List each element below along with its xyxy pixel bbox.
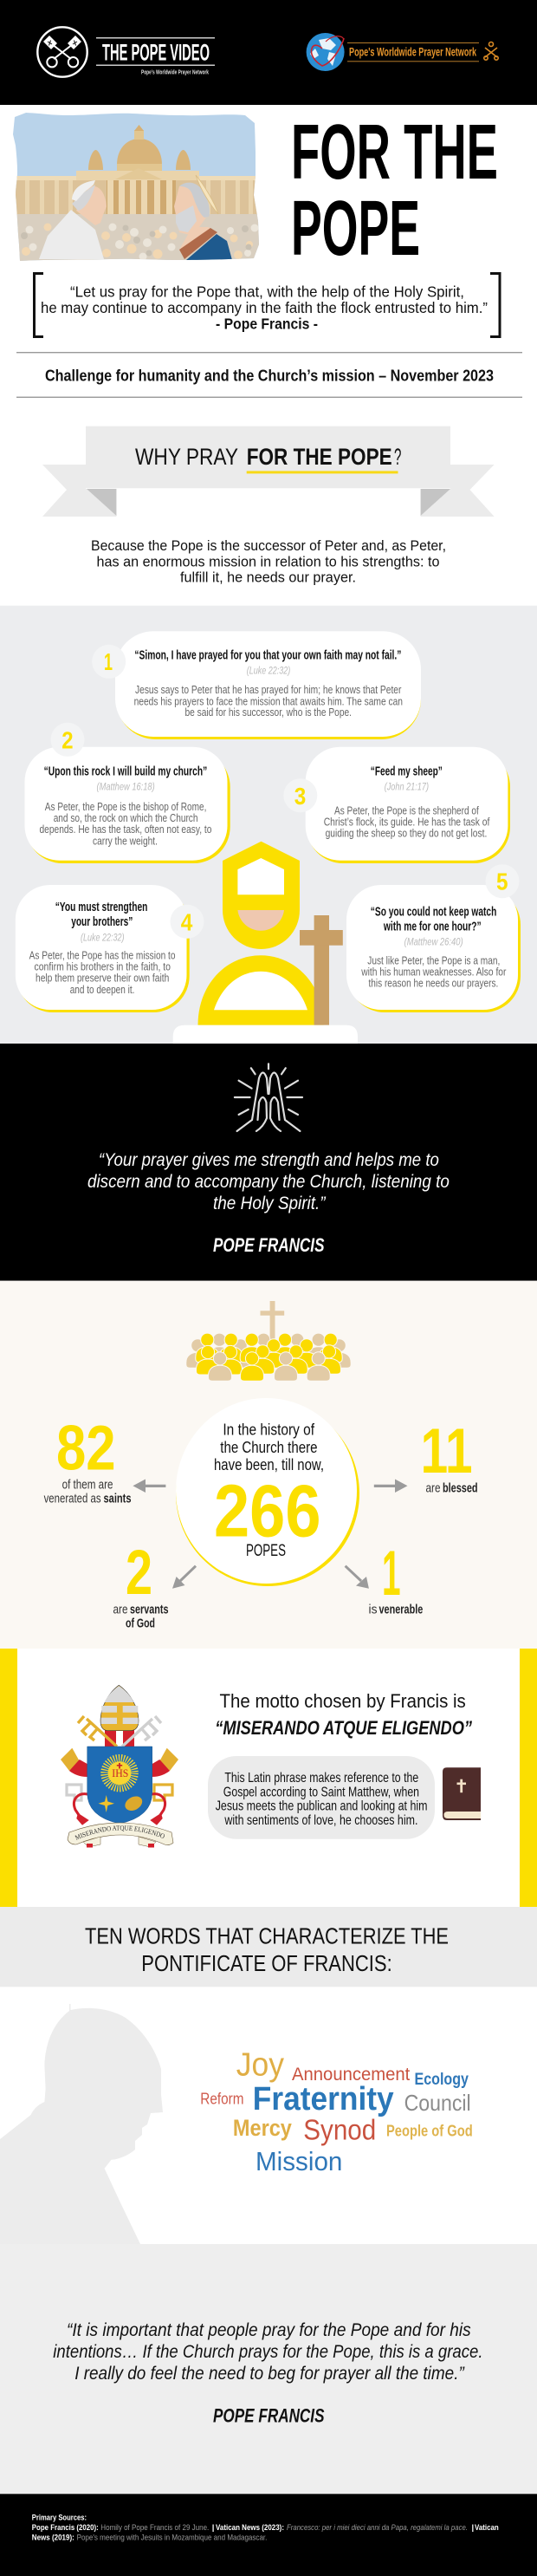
panel: five reasons (0, 606, 537, 1044)
stat: 1 venerable: venerable (379, 1603, 423, 1617)
icon: praying hands with rays (235, 1064, 302, 1131)
banner: why pray for the Pope (42, 426, 495, 517)
logo: The Pope Video: THE POPE VIDEO (102, 39, 210, 65)
central circle: In the history of (223, 1421, 315, 1439)
motto ribbon (68, 1822, 173, 1848)
card 1: be said for his successor, who is the Pope. (185, 706, 352, 719)
footer: primary sources: Primary Sources: (32, 2513, 87, 2522)
central circle: have been, till now, (214, 1456, 324, 1473)
title (291, 109, 498, 272)
motto heading: “MISERANDO ATQUE ELIGENDO” (215, 1717, 472, 1739)
card 2 (24, 723, 230, 863)
word cloud: Reform (200, 2091, 244, 2108)
arrow: to blessed (374, 1479, 407, 1493)
stat: 11 blessed: 11 (421, 1416, 473, 1486)
coat of arms of Pope Francis (61, 1685, 178, 1848)
card 2: As Peter, the Pope is the bishop of Rome, (45, 801, 206, 813)
crowd (17, 214, 259, 261)
card 1: (Luke 22:32) (247, 665, 290, 677)
footer: primary sources (0, 2494, 537, 2576)
title: POPE (291, 185, 420, 272)
card 3: Christ’s flock, its guide. He has the task of (324, 816, 490, 828)
stat: 82 saints: 82 (56, 1414, 116, 1484)
card 1 (92, 631, 421, 739)
panel: closing quote: intentions… If the Church prays for the Pope, this is a grace. (53, 2342, 483, 2362)
card 5: this reason he needs our prayers. (369, 977, 498, 989)
stat: 2 servants of God: 2 (126, 1538, 152, 1608)
stat: 82 saints (44, 1414, 132, 1506)
quote text: “Your prayer gives me strength and helps me to (99, 1150, 439, 1170)
panel: closing quote: I really do feel the need to beg for prayer all the time.” (74, 2364, 465, 2384)
heading: ten words (0, 1907, 537, 1987)
card 5: with me for one hour?” (383, 919, 482, 933)
card 4: confirm his brothers in the faith, to (35, 961, 171, 973)
central circle: the Church there (220, 1439, 317, 1456)
panel: closing quote: POPE FRANCIS (213, 2404, 325, 2426)
logo: Pope's Worldwide Prayer Network (307, 33, 498, 71)
card 4: As Peter, the Pope has the mission to (29, 950, 176, 962)
basilica (16, 125, 257, 215)
card 4: “You must strengthen (55, 900, 147, 914)
subtitle: challenge and date: Challenge for humanity and the Church’s mission – November 2023 (45, 367, 494, 384)
footer: primary sources: Homily of Pope Francis of 29 June. (100, 2523, 209, 2533)
silhouette of Pope Francis (0, 2004, 163, 2244)
card 3: “Feed my sheep” (371, 764, 443, 778)
illustration: Pope and Saint Peter before the basilica (9, 108, 264, 266)
word cloud: Mission (256, 2146, 342, 2176)
stat: 2 servants of God (113, 1538, 168, 1630)
footer: primary sources: | (471, 2523, 474, 2533)
card 4: and to deepen it. (70, 984, 134, 996)
arrow: to venerable (346, 1566, 369, 1589)
card 1: Jesus says to Peter that he has prayed for him; he knows that Peter (135, 684, 401, 696)
footer: primary sources: Vatican (475, 2523, 499, 2533)
card 4: (Luke 22:32) (81, 931, 125, 943)
stat: 2 servants of God: servants (130, 1603, 168, 1617)
card 5: with his human weaknesses. Also for (360, 966, 506, 978)
footer: primary sources: Pope's meeting with Jesuits in Mozambique and Madagascar. (77, 2534, 267, 2543)
prayer intention quote in brackets: “Let us pray for the Pope that, with the help of the Holy Spirit, (70, 283, 464, 301)
card 2: 2 (61, 726, 73, 753)
stat: 82 saints: of them are (62, 1478, 113, 1493)
quote text: discern and to accompany the Church, listening to (87, 1172, 450, 1192)
card 5: 5 (496, 868, 508, 895)
card 1: 1 (104, 648, 113, 675)
stat: 1 venerable (369, 1538, 423, 1617)
card 3 (283, 747, 510, 863)
card 2: depends. He has the task, often not easy, to (40, 823, 211, 836)
central circle: 266 (214, 1471, 320, 1553)
figure: stylised Pope with cross (173, 842, 358, 1044)
heading: ten words: PONTIFICATE OF FRANCIS: (141, 1952, 392, 1976)
word cloud: Council (404, 2090, 471, 2116)
word cloud: Announcement (292, 2065, 410, 2085)
quote text (87, 1150, 450, 1213)
figure: Saint Peter (174, 175, 232, 260)
prayer intention quote in brackets: he may continue to accompany in the faith the flock entrusted to him.” (41, 299, 488, 316)
explanation bubble (208, 1756, 435, 1839)
word cloud: Mercy (233, 2115, 292, 2141)
intro paragraph: fulfill it, he needs our prayer. (180, 570, 356, 586)
card 3: guiding the sheep so they do not get lost. (326, 827, 487, 839)
banner: why pray for the Pope: WHY PRAY (135, 444, 238, 470)
stat: 2 servants of God: are (113, 1603, 128, 1617)
attribution: POPE FRANCIS (213, 1234, 325, 1256)
explanation bubble: This Latin phrase makes reference to the (224, 1771, 418, 1786)
prayer intention quote in brackets (35, 274, 500, 336)
arrow: to servants of God (172, 1566, 196, 1589)
panel: 266 popes statistics (0, 1281, 537, 1649)
logo: The Pope Video (37, 27, 215, 77)
stat: 82 saints: saints (104, 1491, 132, 1506)
footer: primary sources: Pope Francis (2020): (32, 2523, 99, 2533)
coat of arms of Pope Francis: IHS (112, 1766, 128, 1779)
card 3: (John 21:17) (385, 781, 429, 793)
word cloud: Joy (236, 2046, 284, 2083)
panel: Pope Francis quote on black (0, 1044, 537, 1281)
stat: 11 blessed: are (426, 1481, 440, 1496)
card 5 (346, 864, 521, 1012)
banner: why pray for the Pope: FOR THE POPE (247, 444, 392, 470)
panel: header bar (0, 0, 537, 105)
figure: Pope Francis (39, 180, 107, 259)
stat: 11 blessed: blessed (443, 1481, 478, 1496)
card 3: As Peter, the Pope is the shepherd of (334, 804, 479, 816)
motto ribbon: MISERANDO ATQUE ELIGENDO (74, 1825, 165, 1840)
card 3: 3 (294, 783, 306, 810)
card 4: 4 (181, 908, 193, 935)
stat: 1 venerable: 1 (382, 1538, 401, 1609)
prayer intention quote in brackets: - Pope Francis - (216, 315, 318, 332)
intro paragraph: has an enormous mission in relation to his strengths: to (97, 554, 440, 569)
footer: primary sources: Vatican News (2023): (216, 2523, 284, 2533)
word cloud: People of God (386, 2122, 473, 2139)
footer: primary sources: Francesco: per i miei dieci anni da Papa, regalatemi la pace. (287, 2523, 468, 2533)
icon: crowd with cross (186, 1301, 351, 1381)
card 1: needs his prayers to face the mission that awaits him. The same can (134, 695, 403, 707)
explanation bubble: with sentiments of love, he chooses him. (224, 1813, 417, 1828)
card 2: “Upon this rock I will build my church” (44, 764, 207, 778)
motto heading (215, 1690, 472, 1739)
icon: Bible (443, 1767, 481, 1820)
card 4: your brothers” (71, 914, 133, 929)
panel: closing quote (0, 2244, 537, 2494)
stat: 1 venerable: is (369, 1603, 378, 1617)
logo: The Pope Video: Pope's Worldwide Prayer Network (141, 69, 209, 75)
card 4 (16, 885, 204, 1012)
card 4: help them preserve their own faith (36, 973, 169, 985)
card 2: and so, the rock on which the Church (54, 812, 198, 824)
intro paragraph: Because the Pope is the successor of Peter and, as Peter, (91, 538, 446, 554)
explanation bubble: Jesus meets the publican and looking at him (216, 1799, 428, 1814)
card 5: (Matthew 26:40) (404, 936, 463, 948)
stat: 2 servants of God: of God (126, 1616, 155, 1630)
card 2: carry the weight. (93, 835, 158, 847)
word cloud: Synod (303, 2113, 376, 2145)
explanation bubble: Gospel according to Saint Matthew, when (223, 1785, 419, 1799)
panel: closing quote: “It is important that people pray for the Pope and for his (67, 2320, 471, 2340)
word cloud: Ecology (414, 2071, 469, 2089)
central circle: POPES (246, 1542, 286, 1560)
banner: why pray for the Pope: ? (394, 444, 401, 470)
word cloud: Fraternity (253, 2081, 394, 2117)
intro paragraph (91, 538, 446, 586)
arrow: to saints (133, 1479, 165, 1493)
side ornaments (61, 1748, 178, 1825)
stat: 82 saints: venerated as (44, 1491, 101, 1506)
heading: ten words: TEN WORDS THAT CHARACTERIZE THE (85, 1924, 449, 1948)
keys (78, 1716, 161, 1747)
logo: Pope's Worldwide Prayer Network: Pope's Worldwide Prayer Network (349, 45, 476, 58)
word cloud (200, 2046, 473, 2176)
central circle (176, 1398, 359, 1586)
quote text: the Holy Spirit.” (213, 1194, 327, 1213)
card 2: (Matthew 16:18) (97, 781, 155, 793)
card 5: Just like Peter, the Pope is a man, (367, 954, 500, 966)
card 1: “Simon, I have prayed for you that your own faith may not fail.” (134, 648, 401, 663)
footer: primary sources: | (212, 2523, 214, 2533)
motto heading: The motto chosen by Francis is (220, 1690, 466, 1712)
panel: motto (0, 1649, 537, 1907)
footer: primary sources: News (2019): (32, 2534, 74, 2543)
